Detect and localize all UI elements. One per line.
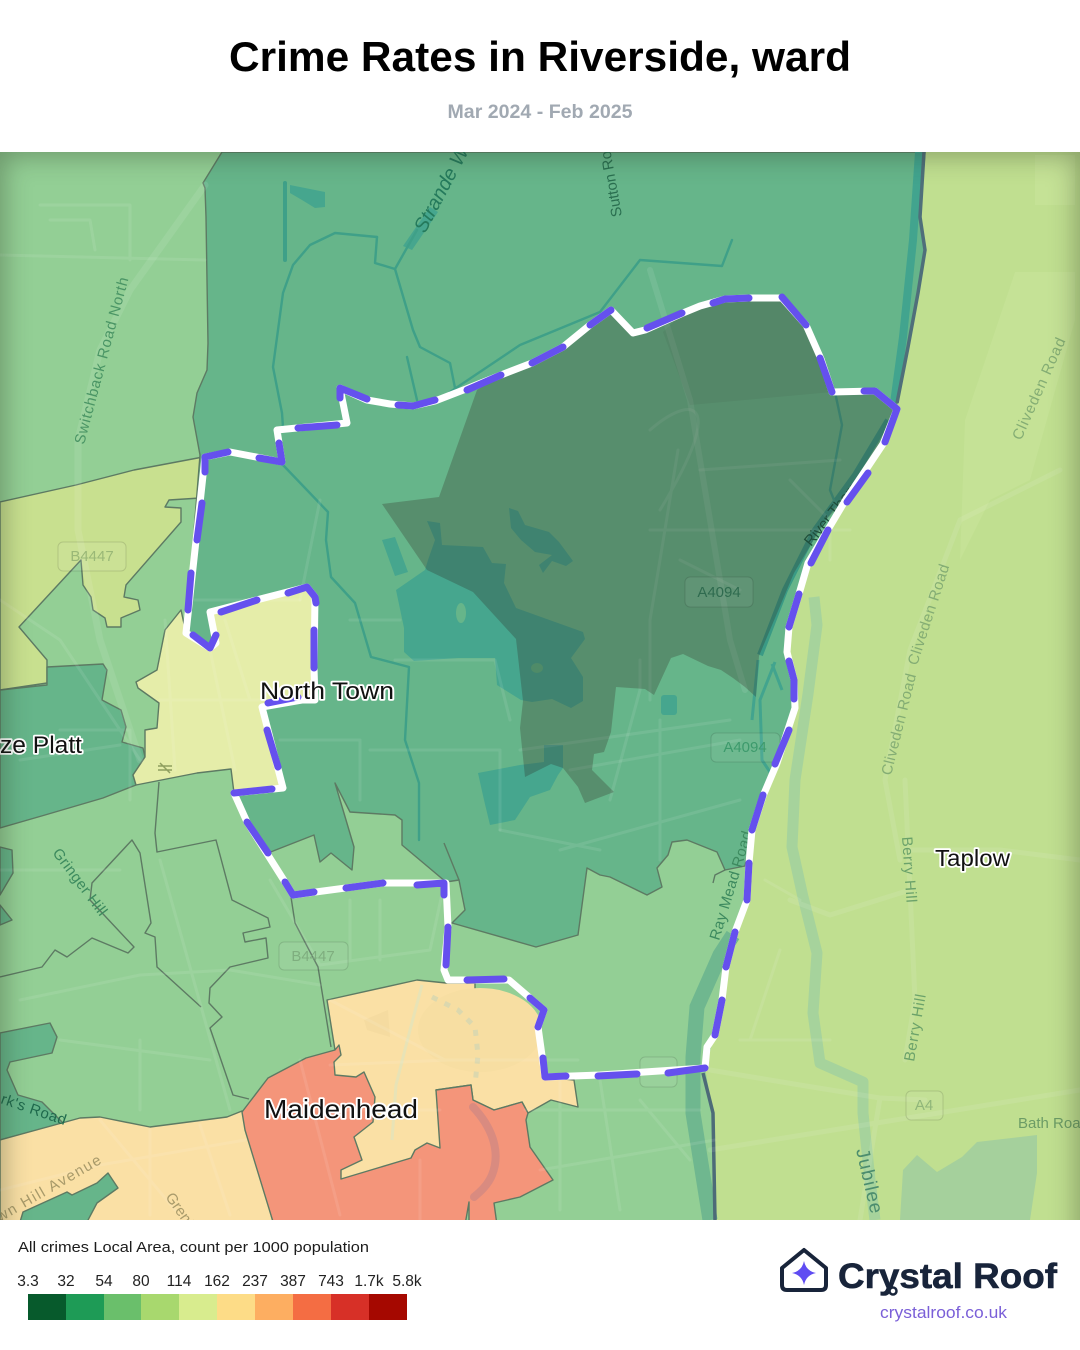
lake: Taplow — [900, 1135, 1037, 1220]
legend tick labels: 3.3 — [17, 1273, 39, 1290]
ward boundary: white base — [186, 298, 897, 1077]
legend tick labels: 743 — [318, 1273, 344, 1290]
river: Thames boundary line — [897, 152, 925, 403]
shield: B4447 west: B4447 — [70, 548, 114, 565]
ward boundary: purple dashes — [188, 297, 897, 1077]
road labels: Grenfell — [162, 1190, 206, 1242]
shield: A4094 north — [685, 577, 753, 607]
place label: Furze Platt: ze Platt — [0, 732, 82, 759]
region: Maidenhead salmon — [242, 1045, 553, 1225]
legend tick labels — [17, 1273, 422, 1290]
river: Thames side channels — [752, 660, 782, 775]
legend tick labels: 5.8k — [392, 1273, 422, 1290]
shield: B4447 south: B4447 — [291, 948, 335, 965]
river: Thames mid channel — [760, 420, 888, 655]
lake: south — [478, 745, 563, 825]
tan centre detail — [390, 984, 542, 1140]
title: Crime Rates in Riverside, ward — [229, 33, 851, 80]
legend tick labels: 387 — [280, 1273, 306, 1290]
legend tick labels: 32 — [57, 1273, 75, 1290]
region: Furze Platt — [0, 664, 145, 828]
place label: Taplow: Taplow — [935, 845, 1010, 871]
road labels: Gringer Hill — [49, 845, 111, 919]
legend tick labels: 114 — [167, 1273, 192, 1290]
legend — [17, 1239, 422, 1320]
road labels: Jubilee — [851, 1146, 886, 1215]
region: lighter areas of Taplow — [960, 155, 1075, 560]
road labels: rk's Road — [0, 1091, 69, 1129]
logo: Crystal Roof — [782, 1250, 1057, 1322]
lake: north — [509, 508, 573, 573]
region: west dark patches — [0, 847, 13, 925]
road labels: Cliveden Road — [905, 562, 953, 667]
shield: A4 Taplow — [906, 1091, 943, 1120]
subtitle: date range: Mar 2024 - Feb 2025 — [448, 102, 633, 123]
website url: crystalroof.co.uk — [880, 1304, 1008, 1322]
river: Thames lower boundary line — [703, 1073, 715, 1220]
shaded development overlay — [382, 298, 897, 803]
shield: A4 under boundary — [640, 1057, 677, 1087]
road labels: Cliveden Road — [878, 672, 920, 777]
ponds — [290, 185, 677, 715]
shield: A4094 south — [711, 733, 780, 762]
lake islet — [531, 663, 543, 673]
region: tan centre — [326, 979, 579, 1178]
road labels: Berry Hill — [898, 836, 920, 903]
road labels: Switchback Road North — [71, 275, 132, 446]
place label: North Town: North Town — [260, 678, 394, 705]
road labels: Sutton Road — [595, 133, 626, 218]
road labels: Strande Water — [410, 111, 490, 236]
darker field in overlay — [663, 298, 832, 405]
legend tick labels: 237 — [242, 1273, 268, 1290]
icon: railway station — [158, 763, 172, 773]
region: Park's Road dark — [0, 1023, 63, 1140]
legend tick labels: 54 — [95, 1273, 113, 1290]
region outlines: west wards — [0, 782, 725, 1099]
icon: house with star — [782, 1250, 826, 1290]
legend title: All crimes Local Area, count per 1000 population — [18, 1239, 369, 1256]
legend tick labels: 80 — [132, 1273, 150, 1290]
region: North Town pale — [133, 587, 315, 793]
road labels: River Thames — [801, 467, 872, 550]
river: Jubilee — [792, 597, 875, 1220]
roads — [0, 185, 1080, 1220]
place label: Maidenhead: Maidenhead — [264, 1094, 418, 1124]
shield: B4447 west — [58, 542, 126, 571]
lake: main with overlay — [396, 521, 585, 708]
road labels: Cliveden Road — [1009, 335, 1069, 443]
shield: A4 Taplow: A4 — [915, 1097, 933, 1114]
wordmark y ring — [890, 1288, 896, 1294]
region: west yellow-green — [0, 457, 203, 690]
region: tan south-west — [0, 1111, 274, 1225]
river: Thames lower channel — [693, 935, 733, 1220]
shield: A4094 south: A4094 — [723, 739, 767, 756]
streams — [273, 183, 842, 840]
salmon detail road — [473, 1107, 496, 1197]
road labels: Berry Hill — [901, 993, 930, 1063]
region: dark patch in tan — [20, 1173, 118, 1222]
legend colour scale — [28, 1294, 407, 1320]
shield: B4447 south — [279, 942, 348, 970]
legend tick labels: 162 — [204, 1273, 230, 1290]
shield: A4094 north: A4094 — [697, 584, 741, 601]
region: Taplow — [705, 152, 1080, 1220]
road labels: Ray Mead Road — [707, 829, 756, 942]
legend tick labels: 1.7k — [354, 1273, 384, 1290]
region: main ward dark green — [186, 152, 925, 947]
river: Thames west channel — [894, 152, 919, 403]
wordmark: Crystal Roof — [838, 1257, 1057, 1296]
lake: island — [456, 603, 466, 623]
